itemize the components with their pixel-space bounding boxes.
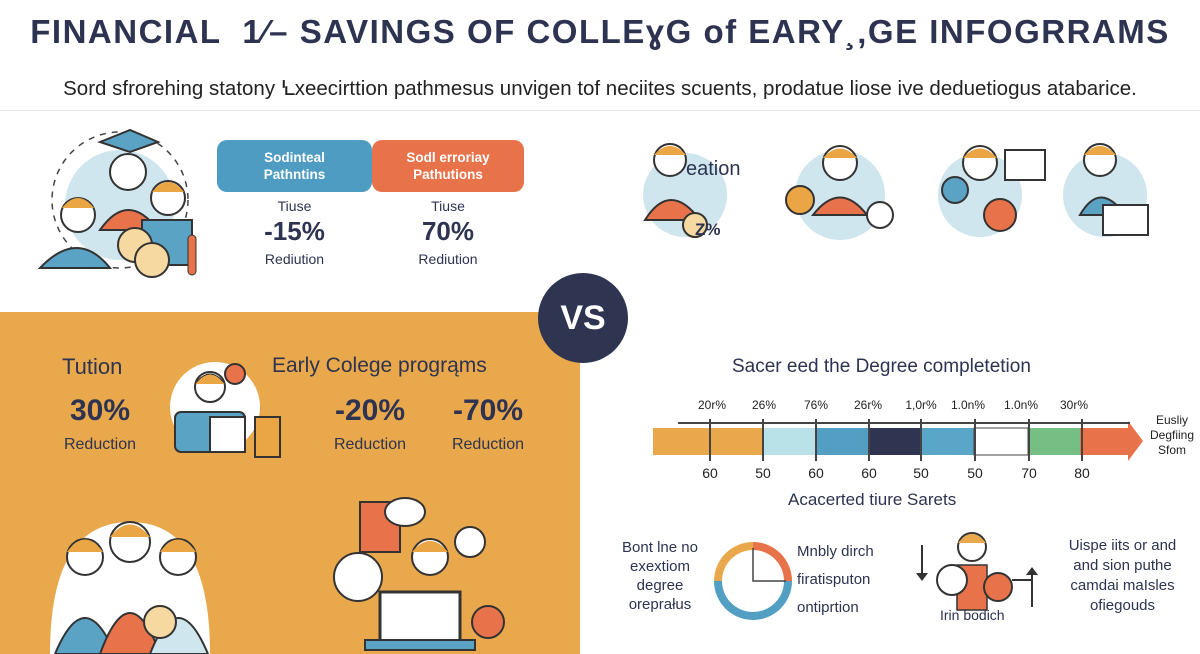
VS badge: VS [560, 299, 606, 337]
timeline bar chart: 1,0r% [905, 398, 937, 412]
icon row: top right [643, 143, 1149, 240]
pathway label: blue [217, 140, 372, 192]
stat: -70% [452, 394, 524, 453]
stat: -15% [264, 198, 325, 267]
text: middle description: ontiprtion [797, 599, 859, 616]
stat: -15%: Tiuse [278, 198, 311, 214]
icon caption: 7%: Z% [695, 220, 720, 239]
icon: students with laptop [333, 497, 505, 651]
pathway label: orange: Sodl erroriay [406, 150, 490, 165]
heading: accelerated time: Acacerted tiure Sarets [788, 490, 956, 509]
pathway label: blue: Pathntins [264, 167, 325, 182]
top divider line [0, 110, 1200, 111]
text: middle description: Mnbly dirch [797, 543, 874, 560]
title: FINANCIAL 1⁄– SAVINGS OF COLLEɣG of EARY¸‚GE INFOGRRAMS [30, 13, 1170, 50]
timeline bar chart: 60 [702, 465, 718, 481]
stat: 70%: 70% [422, 216, 474, 246]
icon: person with computer [916, 532, 1038, 611]
timeline bar chart: 50 [967, 465, 983, 481]
heading: early college programs: Early Colege progrąms [272, 354, 487, 377]
pathway label: orange: Pathutions [413, 167, 483, 182]
icon: student with coins [170, 362, 281, 458]
timeline bar chart [653, 398, 1194, 481]
stat: -20%: -20% [335, 394, 405, 427]
text: left description: Bont lne no [622, 539, 698, 556]
text: middle description [797, 543, 874, 616]
timeline bar chart: 20r% [698, 398, 726, 412]
pathway label: orange [372, 140, 524, 192]
subtitle: Sord sfrorehing statony Ꝇxeecirttion pathmesus unvigen tof neciites scuents, prodatue liose ive deduetiogus atabarice. [63, 77, 1137, 100]
text: right description [1069, 537, 1176, 614]
icon caption: eation: eation [686, 158, 740, 180]
stat: -15%: Rediution [265, 251, 324, 267]
panel: orange left [0, 312, 580, 654]
stat: -70%: Reduction [452, 436, 524, 453]
heading: tution: Tution [62, 354, 122, 379]
icon: group of students [50, 521, 210, 654]
stat: -70%: -70% [453, 394, 523, 427]
timeline bar chart: Sfom [1158, 443, 1186, 457]
heading: degree completion: Sacer eed the Degree completetion [732, 356, 1031, 377]
text: right description: camdai maIsles [1070, 577, 1175, 594]
text: left description: exextiom [630, 558, 690, 575]
stat: 70%: Rediution [418, 251, 478, 267]
timeline bar chart: 50 [755, 465, 771, 481]
text: right description: and sion puthe [1073, 557, 1172, 574]
text: left description: degree [637, 577, 683, 594]
timeline bar chart: 26% [752, 398, 776, 412]
stat: 70% [418, 198, 478, 267]
text: icon caption: Irin bodich [940, 607, 1005, 623]
stat: 30%: 30% [70, 394, 130, 427]
timeline bar chart: 30r% [1060, 398, 1088, 412]
stat: 30% [64, 394, 136, 453]
timeline bar chart: Eusliy [1156, 413, 1188, 427]
timeline bar chart: 80 [1074, 465, 1090, 481]
stat: 30%: Reduction [64, 436, 136, 453]
donut chart [714, 542, 792, 620]
timeline bar chart: 50 [913, 465, 929, 481]
timeline bar chart: 76% [804, 398, 828, 412]
timeline bar chart: 70 [1021, 465, 1037, 481]
pathway label: blue: Sodinteal [264, 150, 325, 165]
illustration: students with graduation cap [38, 128, 196, 278]
stat: 70%: Tiuse [431, 198, 465, 214]
stat: -15%: -15% [264, 216, 325, 246]
text: left description: oreprałus [629, 596, 691, 613]
stat: -20%: Reduction [334, 436, 406, 453]
stat: -20% [334, 394, 406, 453]
timeline bar chart: 1.0n% [951, 398, 985, 412]
timeline bar chart: 1.0n% [1004, 398, 1038, 412]
text: right description: Uispe iits or and [1069, 537, 1176, 554]
VS badge [538, 273, 628, 363]
timeline bar chart: 60 [808, 465, 824, 481]
timeline bar chart: 26r% [854, 398, 882, 412]
text: right description: ofiegouds [1090, 597, 1155, 614]
timeline bar chart: Degfiing [1150, 428, 1194, 442]
text: left description [622, 539, 698, 613]
text: middle description: firatisputon [797, 571, 870, 588]
timeline bar chart: 60 [861, 465, 877, 481]
